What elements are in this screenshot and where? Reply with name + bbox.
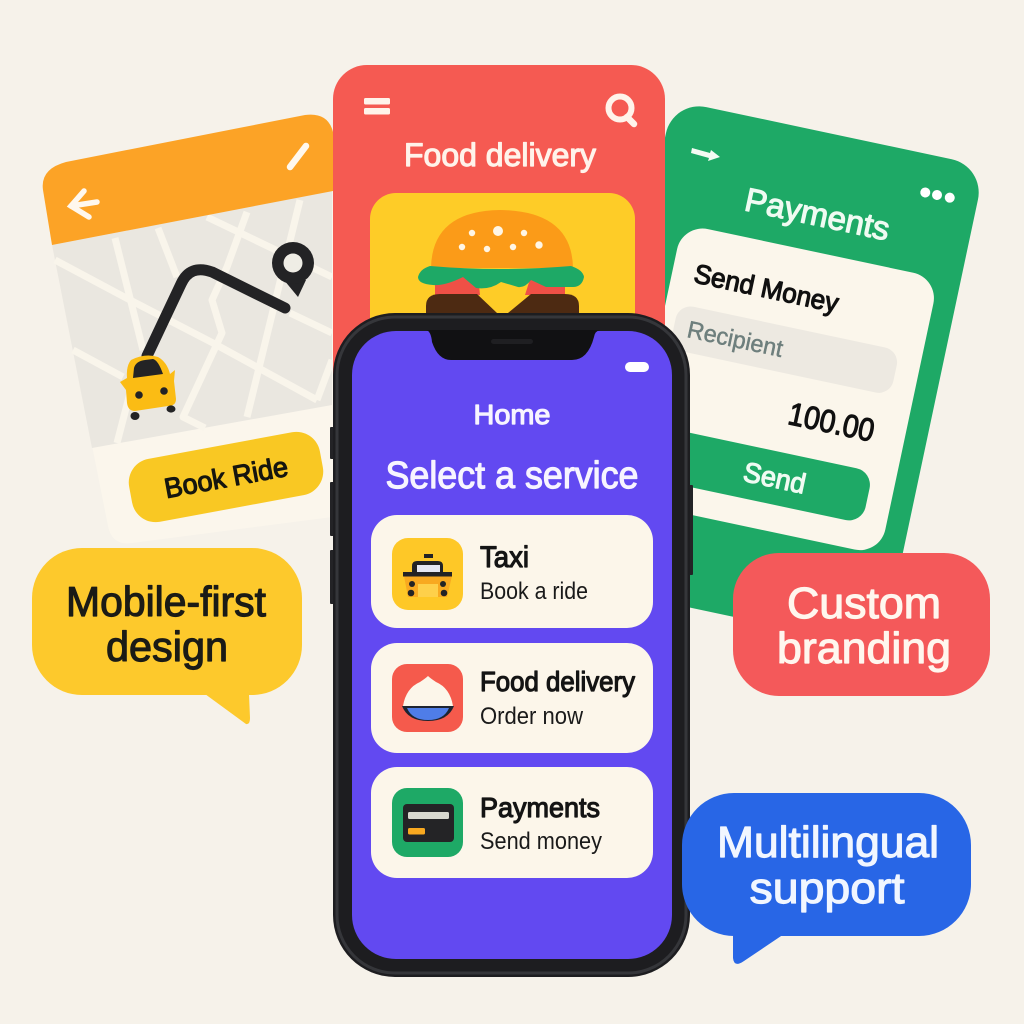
callout: Multilingual support: Multilingual xyxy=(717,818,939,867)
panel: payments app card xyxy=(570,100,985,649)
callout: Mobile-first design: Mobile-first xyxy=(66,578,266,625)
send money form xyxy=(624,224,939,555)
send money form: Recipient xyxy=(685,316,786,363)
service row: taxi: Taxi xyxy=(480,541,529,574)
callout: Custom branding: branding xyxy=(777,624,951,673)
service row: taxi xyxy=(371,515,653,628)
icon: back arrow xyxy=(71,191,97,217)
heading: Food delivery: Food delivery xyxy=(404,137,596,173)
notch xyxy=(426,330,600,360)
icon: cloche xyxy=(392,664,463,732)
button: Book Ride xyxy=(125,428,327,526)
icon: menu xyxy=(364,98,390,114)
status pill xyxy=(625,362,649,372)
route line xyxy=(147,270,285,356)
callout: Multilingual support xyxy=(682,793,971,964)
callout: Custom branding xyxy=(733,553,990,696)
icon: payment card xyxy=(392,788,463,857)
icon: taxi xyxy=(392,538,463,610)
side buttons xyxy=(330,427,693,604)
screen xyxy=(352,331,672,959)
icon: forward arrow xyxy=(691,148,720,161)
panel: food delivery app card xyxy=(333,65,665,485)
icon: more dots xyxy=(919,187,956,204)
icon: search xyxy=(608,96,634,124)
service row: payments: Payments xyxy=(480,792,600,823)
icon: edit stroke xyxy=(290,146,306,167)
service row: payments: Send money xyxy=(480,828,602,855)
panel: taxi app card xyxy=(43,115,340,543)
icon: taxi xyxy=(120,356,176,420)
service row: payments xyxy=(371,767,653,878)
icon: map pin xyxy=(272,242,314,297)
service row: taxi: Book a ride xyxy=(480,578,588,605)
header bar xyxy=(43,115,333,245)
service row: food delivery: Order now xyxy=(480,703,584,730)
callout: Multilingual support: support xyxy=(750,864,904,913)
button: Book Ride: Book Ride xyxy=(162,451,290,504)
send money form: 100.00 xyxy=(785,395,878,449)
send money form: Send xyxy=(741,456,809,500)
service row: food delivery: Food delivery xyxy=(480,666,635,697)
send money form: Send Money xyxy=(691,259,842,319)
map xyxy=(52,191,332,448)
heading: Payments: Payments xyxy=(742,181,893,247)
callout: Mobile-first design: design xyxy=(106,623,228,670)
callout: Mobile-first design xyxy=(32,548,302,724)
callout: Custom branding: Custom xyxy=(787,579,941,628)
service row: food delivery xyxy=(371,643,653,753)
icon: burger xyxy=(418,210,584,325)
title: Home: Home xyxy=(474,399,550,430)
heading: Select a service: Select a service xyxy=(386,455,638,497)
phone mockup xyxy=(330,313,693,977)
burger tile xyxy=(370,193,635,393)
